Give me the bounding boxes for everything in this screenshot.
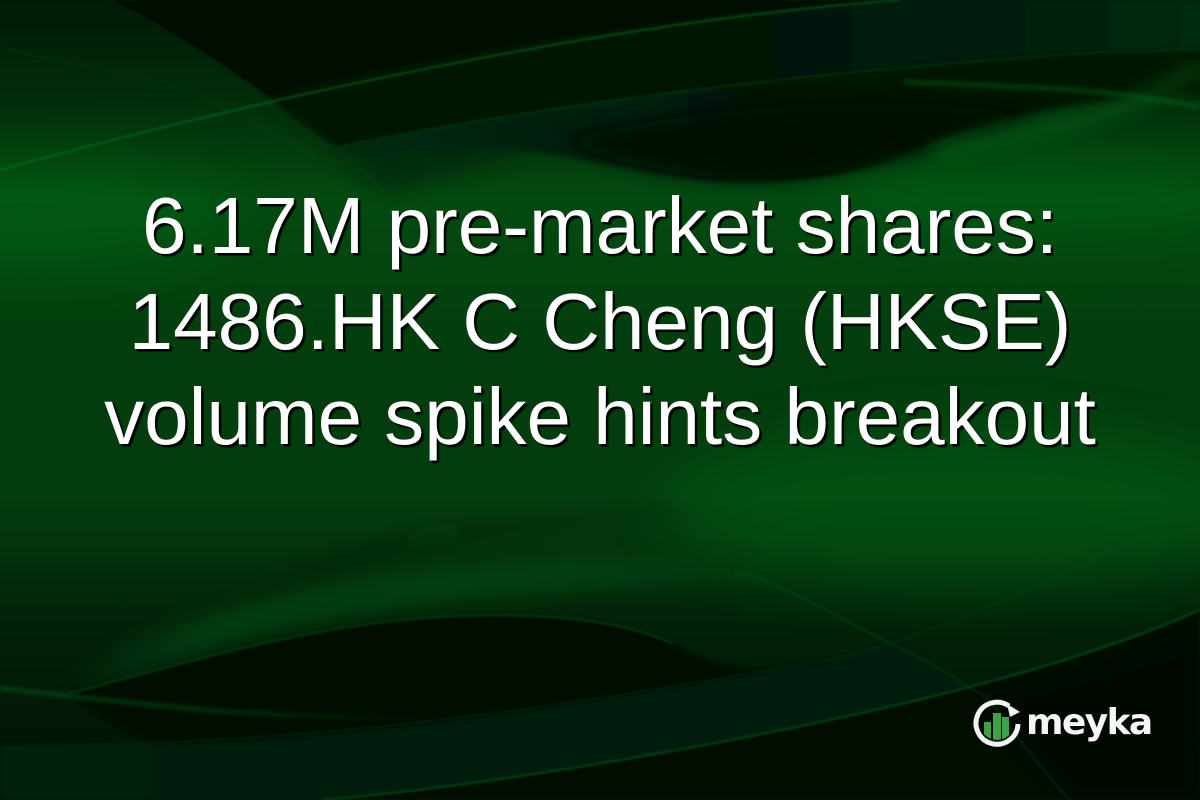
title: volume spike hints breakout [104,372,1096,461]
top swoosh shapes [268,60,580,195]
bottom glow lines [69,615,673,693]
top glow lines [0,0,900,170]
wordmark: meyka [1026,702,1152,742]
bottom dark regions [0,640,1070,800]
title [104,181,1098,464]
bottom band [77,572,780,687]
title: 1486.HK C Cheng (HKSE) [129,276,1071,366]
title: 6.17M pre-market shares: [142,181,1058,270]
glow areas [0,155,240,275]
icon: circular arrow with green bars [973,700,1020,747]
logo: meyka [973,700,1152,747]
